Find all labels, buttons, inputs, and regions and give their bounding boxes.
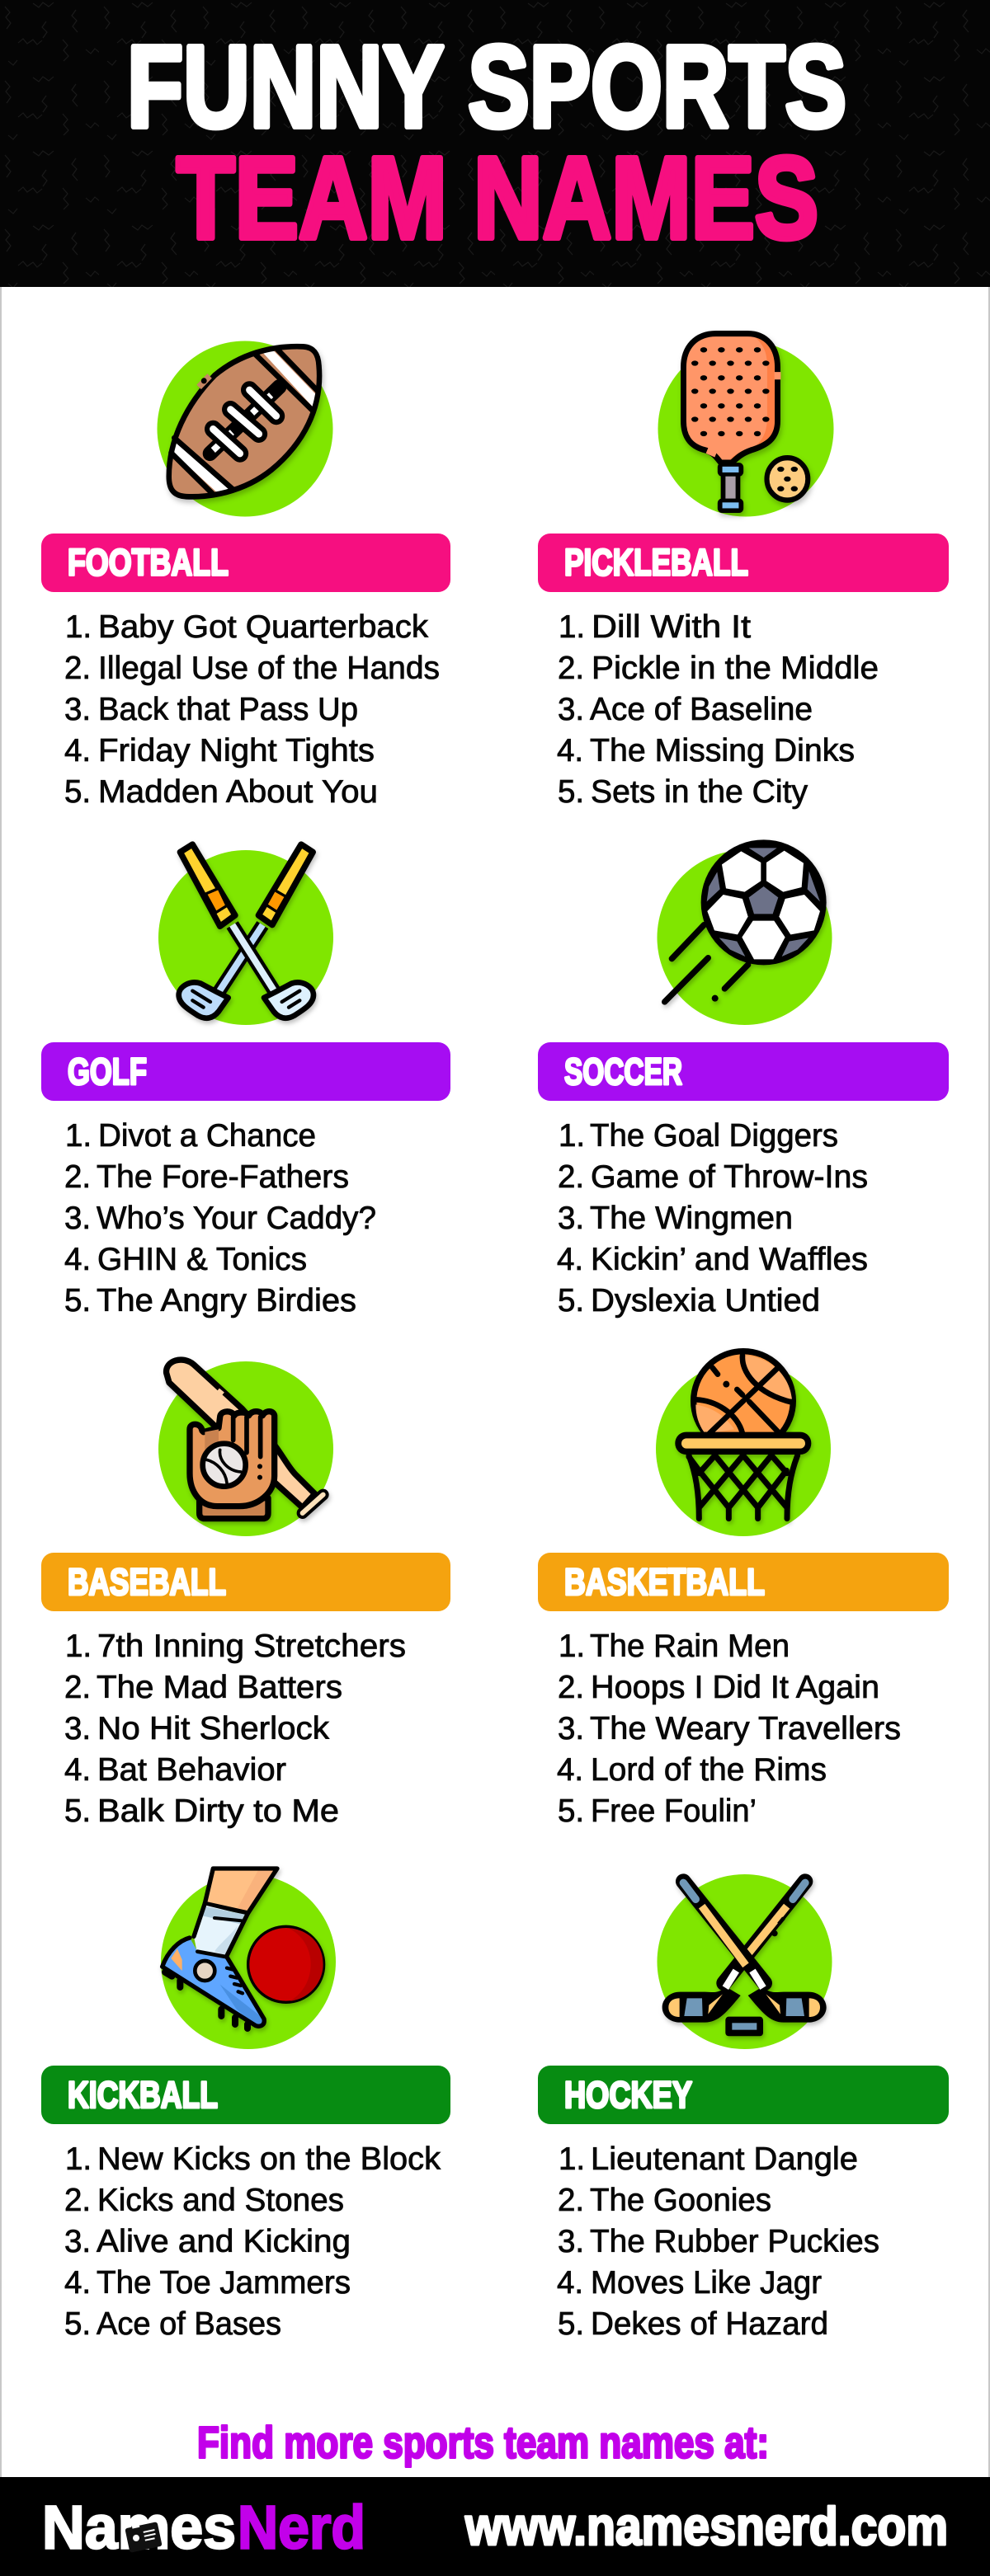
list: soccer names: Game of Throw-Ins [591,1159,868,1195]
list: football names: 3. [64,692,91,727]
footer bar [0,2477,990,2576]
list: soccer names: 5. [558,1283,584,1319]
list: pickleball names: 3. [558,692,584,727]
title: team names: TEAM NAMES [177,132,818,262]
list: basketball names: Lord of the Rims [591,1752,827,1788]
icon: crossed golf clubs [158,844,333,1025]
icon: basketball and hoop [656,1351,831,1536]
panel: golf [41,844,450,1319]
list: soccer names [557,1118,868,1319]
heading: kickball [41,2066,450,2124]
list: baseball names: 2. [64,1670,91,1705]
icon: football on green circle [157,341,333,516]
heading: baseball [41,1553,450,1611]
list: hockey names: Lieutenant Dangle [591,2141,858,2177]
list: golf names: The Angry Birdies [97,1283,356,1319]
list: hockey names: 2. [558,2183,584,2218]
list: baseball names: No Hit Sherlock [97,1711,330,1746]
list: baseball names: Balk Dirty to Me [97,1793,339,1829]
panel: soccer [538,839,949,1319]
heading: football: FOOTBALL [68,541,229,584]
list: hockey names: 5. [558,2306,584,2342]
list: kickball names: 4. [64,2265,91,2301]
list: basketball names: 5. [558,1793,584,1829]
list: pickleball names: Sets in the City [591,774,808,810]
list: pickleball names: 2. [558,651,584,686]
list: football names: Friday Night Tights [98,733,375,769]
list: football names: Illegal Use of the Hands [98,651,440,686]
list: pickleball names: 5. [558,774,584,810]
list: golf names: The Fore-Fathers [97,1159,349,1195]
list: golf names [64,1118,376,1319]
list: pickleball names [557,609,879,810]
header banner [0,0,990,287]
list: hockey names: The Goonies [590,2183,771,2218]
icon: soccer ball in motion [657,839,832,1025]
list: kickball names: New Kicks on the Block [97,2141,441,2177]
list: football names: Back that Pass Up [98,692,358,727]
list: soccer names: 1. [559,1118,585,1154]
list: kickball names [64,2141,441,2342]
heading: pickleball [538,534,949,592]
list: hockey names: 1. [559,2141,585,2177]
icon: pickleball paddle and ball [658,334,833,516]
list: kickball names: The Toe Jammers [97,2265,351,2301]
list: baseball names: 3. [64,1711,91,1746]
heading: golf: GOLF [68,1051,147,1093]
icon: cleated foot and red ball [161,1869,336,2049]
icon: crossed hockey sticks and puck [657,1874,832,2049]
logo: NamesNerd: Nerd [238,2494,365,2561]
list: baseball names: 7th Inning Stretchers [97,1629,406,1664]
panel: baseball [41,1360,450,1829]
list: golf names: 1. [65,1118,92,1154]
list: kickball names: Kicks and Stones [97,2183,344,2218]
list: basketball names: The Weary Travellers [590,1711,901,1746]
heading: pickleball: PICKLEBALL [564,541,748,584]
list: baseball names: 5. [64,1793,91,1829]
logo: NamesNerd: Names [42,2494,236,2561]
list: golf names: Divot a Chance [98,1118,316,1154]
list: golf names: 2. [64,1159,91,1195]
heading: golf [41,1042,450,1101]
list: football names: 1. [65,609,92,645]
panel: pickleball [538,334,949,810]
list: baseball names: The Mad Batters [97,1670,342,1705]
list: pickleball names: Dill With It [592,609,751,645]
list: basketball names: Free Foulin’ [591,1793,757,1829]
list: hockey names [557,2141,879,2342]
list: hockey names: Moves Like Jagr [591,2265,822,2301]
list: baseball names: Bat Behavior [97,1752,286,1788]
heading: basketball: BASKETBALL [564,1561,765,1603]
list: basketball names: 4. [557,1752,583,1788]
icon: baseball bat and glove [158,1360,333,1536]
heading: baseball: BASEBALL [68,1561,226,1603]
list: football names: Madden About You [98,774,378,810]
list: golf names: 5. [64,1283,91,1319]
list: hockey names: Dekes of Hazard [591,2306,828,2342]
list: kickball names: 5. [64,2306,91,2342]
list: soccer names: Kickin’ and Waffles [591,1242,868,1277]
list: pickleball names: 1. [559,609,585,645]
list: golf names: Who’s Your Caddy? [97,1201,376,1236]
list: hockey names: The Rubber Puckies [590,2224,879,2259]
list: baseball names: 4. [64,1752,91,1788]
list: football names: 4. [64,733,91,769]
icon: clipboard in logo [124,2517,163,2553]
list: kickball names: 2. [64,2183,91,2218]
list: hockey names: 4. [557,2265,583,2301]
list: football names: 5. [64,774,91,810]
list: football names: Baby Got Quarterback [98,609,429,645]
list: kickball names: 3. [64,2224,91,2259]
list: soccer names: 3. [558,1201,584,1236]
list: soccer names: Dyslexia Untied [591,1283,820,1319]
list: hockey names: 3. [558,2224,584,2259]
panel: basketball [538,1351,949,1829]
list: soccer names: The Wingmen [590,1201,793,1236]
list: pickleball names: 4. [557,733,583,769]
list: golf names: 4. [64,1242,91,1277]
list: football names [64,609,440,810]
list: pickleball names: Pickle in the Middle [592,651,879,686]
list: soccer names: 2. [558,1159,584,1195]
panel: hockey [538,1874,949,2342]
list: basketball names: Hoops I Did It Again [591,1670,879,1705]
heading: football [41,534,450,592]
heading: hockey [538,2066,949,2124]
list: basketball names: The Rain Men [590,1629,790,1664]
heading: soccer [538,1042,949,1101]
list: basketball names: 2. [558,1670,584,1705]
list: basketball names: 1. [559,1629,585,1664]
list: basketball names: 3. [558,1711,584,1746]
list: kickball names: 1. [65,2141,92,2177]
heading: kickball: KICKBALL [68,2074,218,2116]
list: pickleball names: The Missing Dinks [590,733,855,769]
list: soccer names: 4. [557,1242,583,1277]
list: baseball names: 1. [65,1629,92,1664]
list: baseball names [64,1629,406,1829]
panel: kickball [41,1869,450,2342]
panel: football [41,341,450,810]
heading: hockey: HOCKEY [564,2074,692,2116]
list: kickball names: Ace of Bases [97,2306,281,2342]
list: golf names: GHIN & Tonics [97,1242,307,1277]
call to action text: Find more sports team names at: [197,2418,769,2467]
heading: soccer: SOCCER [564,1051,682,1093]
list: football names: 2. [64,651,91,686]
list: kickball names: Alive and Kicking [97,2224,351,2259]
logo: NamesNerd [42,2494,365,2561]
list: golf names: 3. [64,1201,91,1236]
list: soccer names: The Goal Diggers [590,1118,838,1154]
list: pickleball names: Ace of Baseline [590,692,813,727]
list: basketball names [557,1629,901,1829]
heading: basketball [538,1553,949,1611]
